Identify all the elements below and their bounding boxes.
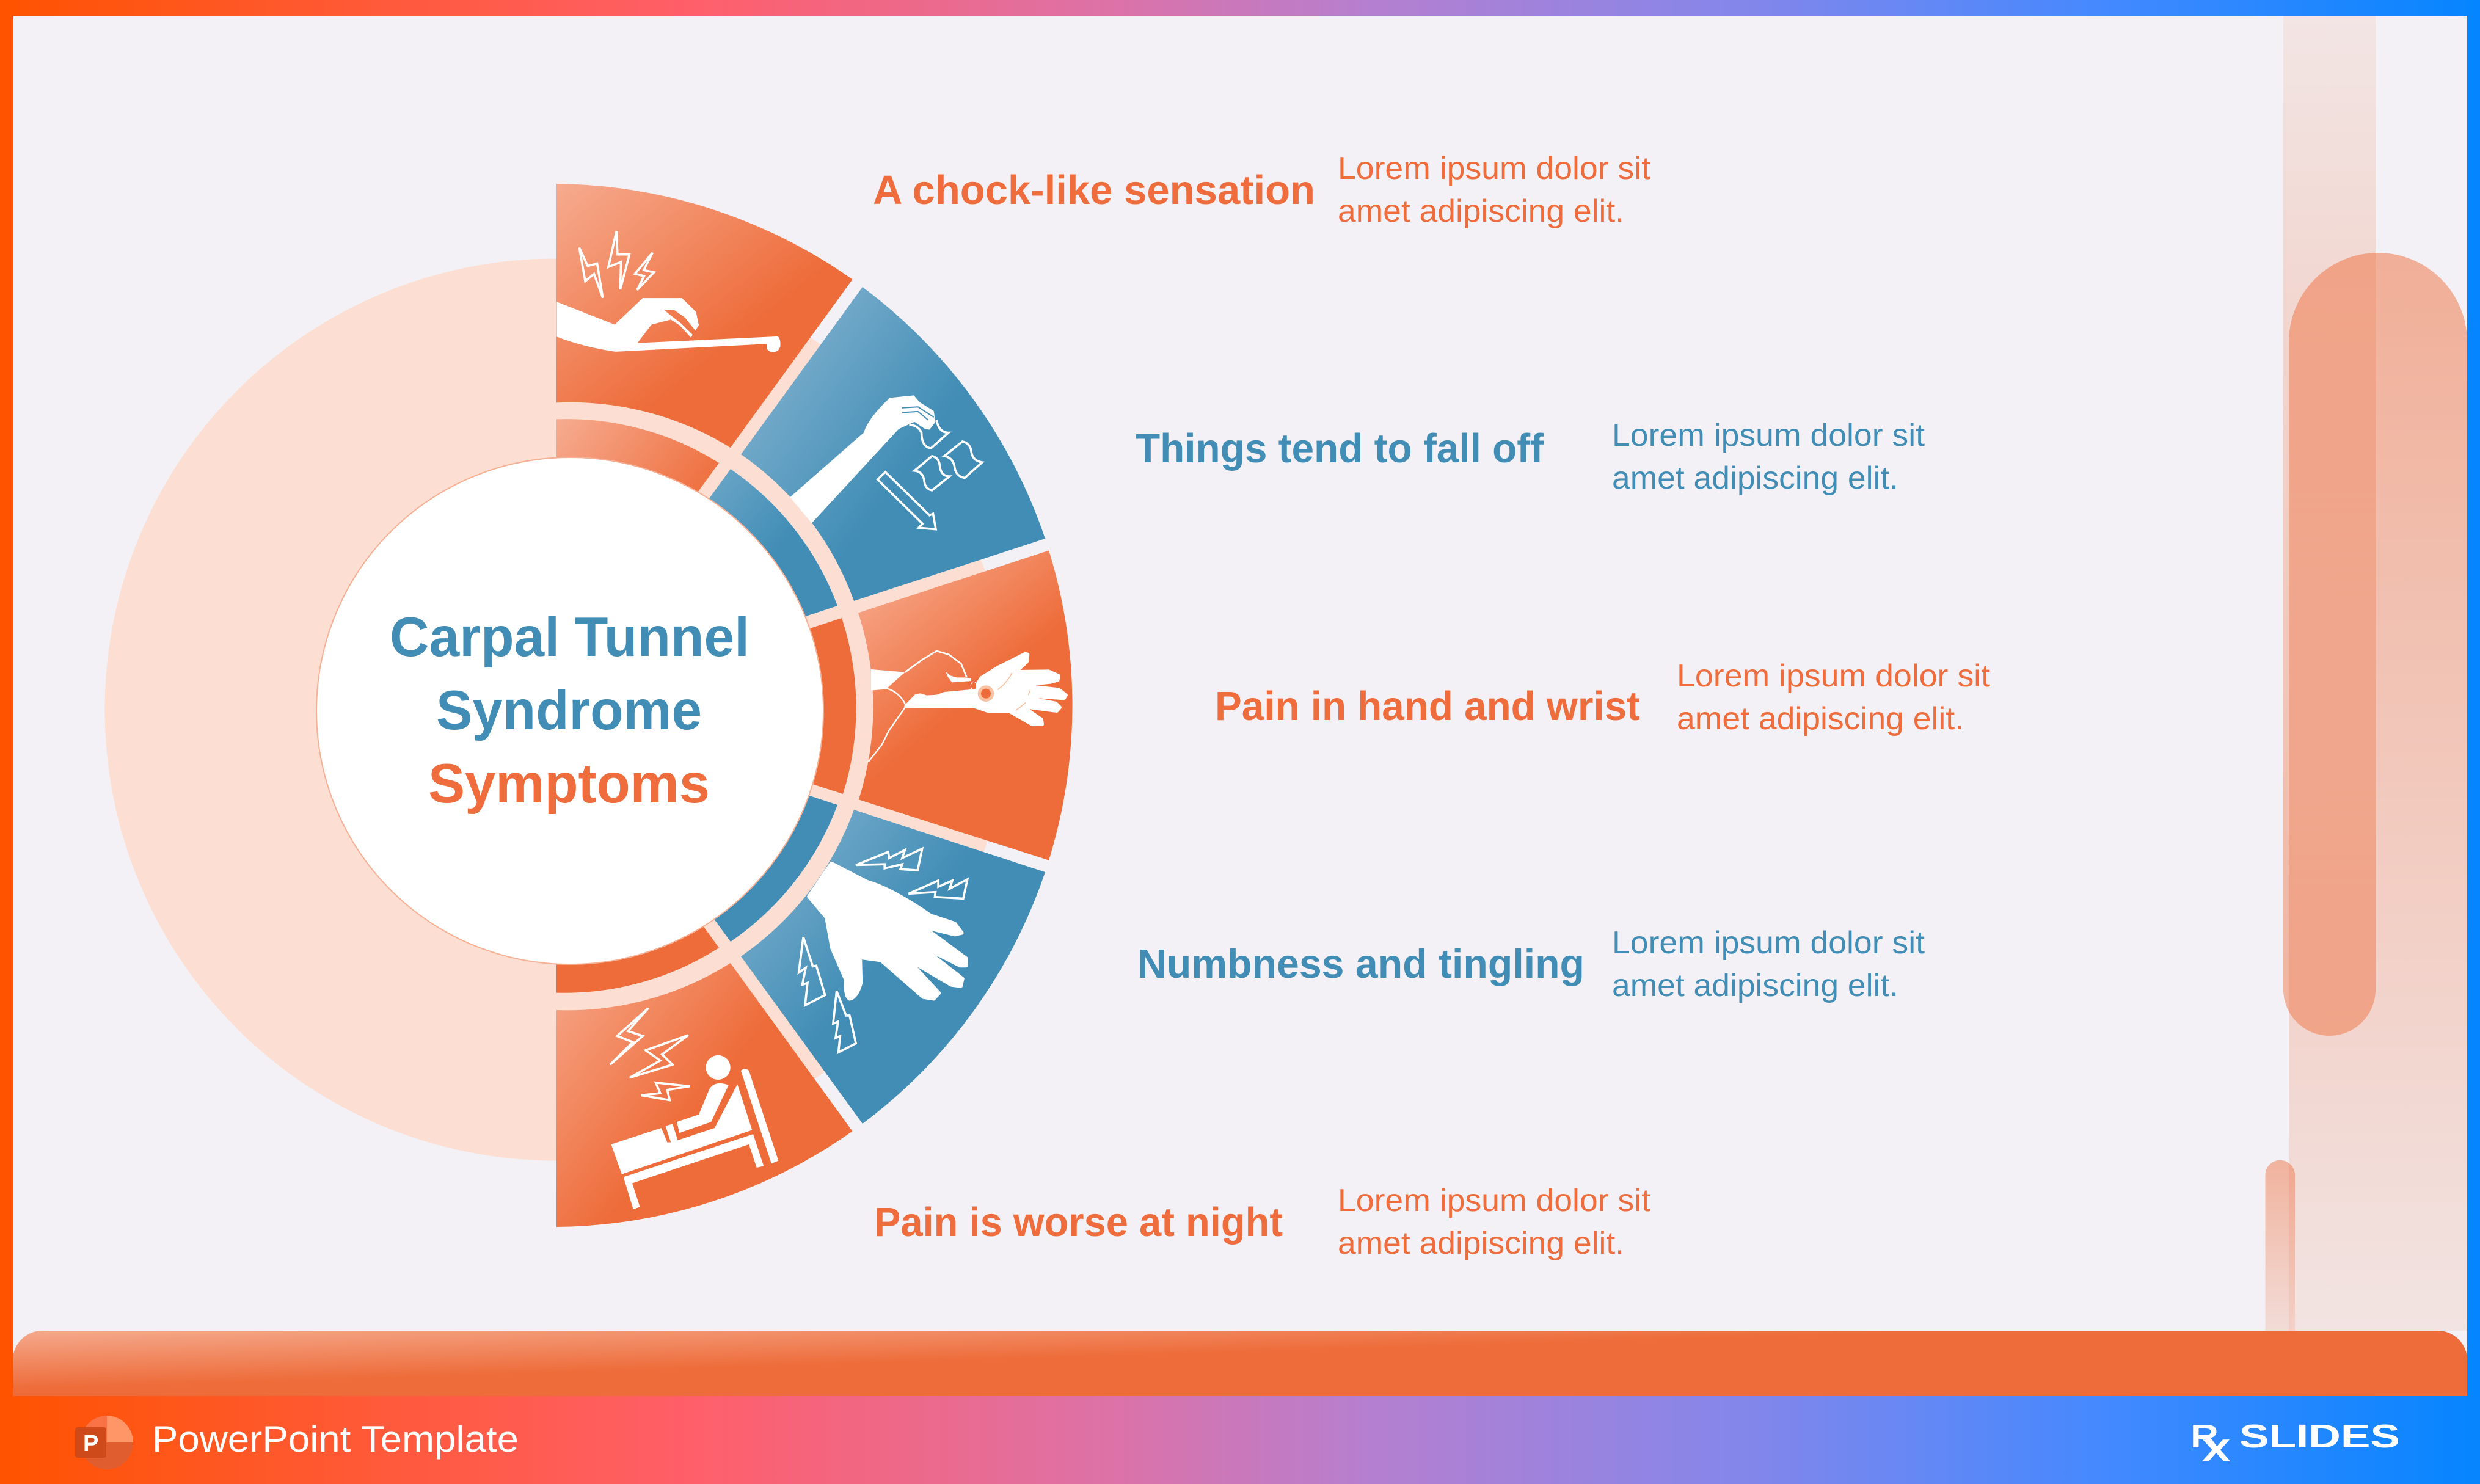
icon: hand holding painful wrist — [869, 651, 1066, 762]
inner wedge — [672, 787, 837, 942]
bottom orange bar — [13, 1331, 2467, 1396]
outer wedge — [741, 810, 1045, 1124]
outer wedge — [556, 184, 853, 448]
footer band — [0, 1396, 2480, 1484]
centre title: Symptoms — [428, 753, 710, 815]
description: amet adipiscing elit. — [1338, 1226, 1624, 1261]
pale backing disc — [105, 259, 1007, 1160]
description — [1612, 925, 1925, 1003]
item: numbness and tingling — [1137, 925, 1925, 1003]
description — [1338, 151, 1651, 229]
frame: top band — [0, 0, 2480, 16]
icon: person awake in bed — [610, 1008, 778, 1209]
icon: PowerPoint logo — [75, 1416, 133, 1469]
RxSlides logo — [2190, 1418, 2400, 1469]
outer wedge — [556, 963, 853, 1227]
heading: Pain is worse at night — [874, 1199, 1283, 1245]
centre title — [390, 606, 749, 815]
segment: numbness and tingling — [672, 787, 1045, 1124]
description: Lorem ipsum dolor sit — [1338, 1183, 1651, 1218]
pill: wide right shape — [2289, 253, 2467, 1331]
RxSlides logo: SLIDES — [2239, 1418, 2400, 1455]
centre circle — [316, 457, 823, 964]
outer wedge — [741, 287, 1045, 601]
segment: shock sensation — [556, 184, 853, 528]
description: Lorem ipsum dolor sit — [1612, 925, 1925, 961]
pill: tall top shape — [2283, 16, 2376, 1036]
item: pain at night — [874, 1183, 1651, 1261]
heading: A chock-like sensation — [873, 167, 1315, 213]
frame: left band — [0, 0, 13, 1484]
icon: hand on bar with shocks — [557, 231, 781, 352]
icon: hand dropping papers — [790, 395, 982, 529]
inner wedge — [556, 419, 719, 528]
inner wedge — [782, 618, 856, 794]
pill: small lower shape — [2265, 1160, 2295, 1331]
description — [1338, 1183, 1651, 1261]
segment: hand and wrist pain — [782, 550, 1073, 860]
description: Lorem ipsum dolor sit — [1612, 418, 1925, 453]
frame: right band — [2467, 0, 2480, 1484]
description: amet adipiscing elit. — [1677, 701, 1964, 737]
RxSlides logo: R — [2190, 1418, 2219, 1455]
description: Lorem ipsum dolor sit — [1338, 151, 1651, 186]
description — [1612, 418, 1925, 496]
outer wedge — [858, 550, 1073, 860]
description: amet adipiscing elit. — [1612, 460, 1898, 496]
description: amet adipiscing elit. — [1338, 194, 1624, 229]
footer label: PowerPoint Template — [152, 1419, 519, 1460]
segment: pain at night — [556, 883, 853, 1227]
item: shock sensation — [873, 151, 1651, 229]
heading: Things tend to fall off — [1136, 426, 1544, 471]
description — [1677, 658, 1991, 737]
segment: things fall off — [672, 287, 1045, 624]
icon: tingling hand — [799, 849, 968, 1052]
item: things fall off — [1136, 418, 1925, 496]
decorative right column pills — [2265, 16, 2467, 1331]
inner wedge — [556, 883, 719, 993]
item: hand and wrist pain — [1215, 658, 1991, 737]
heading: Numbness and tingling — [1137, 941, 1585, 987]
heading: Pain in hand and wrist — [1215, 683, 1640, 729]
description: Lorem ipsum dolor sit — [1677, 658, 1991, 694]
description: amet adipiscing elit. — [1612, 968, 1898, 1003]
centre title: Syndrome — [436, 680, 702, 741]
RxSlides logo: X — [2201, 1433, 2231, 1469]
centre title: Carpal Tunnel — [390, 606, 749, 668]
icon: PowerPoint logo: P — [83, 1431, 98, 1457]
inner wedge — [672, 469, 837, 624]
